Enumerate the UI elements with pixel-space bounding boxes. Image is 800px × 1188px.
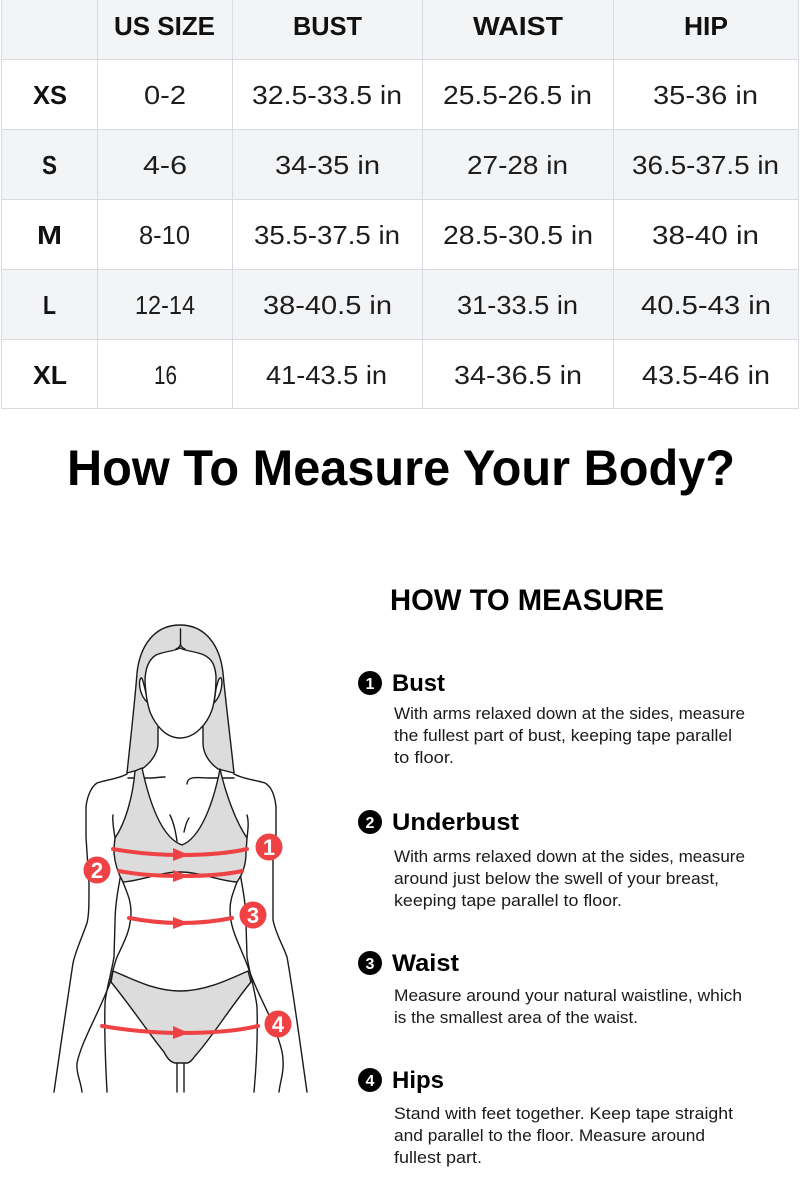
step 1 bust: With arms relaxed down at the sides, measure [394, 705, 745, 723]
step 3 waist: is the smallest area of the waist. [394, 1009, 638, 1027]
row M: 28.5-30.5 in [443, 220, 593, 250]
step 4 hips: 4 [366, 1073, 375, 1090]
marker 2 [84, 856, 110, 884]
step 2 underbust: around just below the swell of your breast, [394, 870, 719, 888]
table header row: BUST [293, 11, 362, 41]
row M: 35.5-37.5 in [254, 220, 400, 250]
marker 1: 1 [263, 835, 275, 860]
row XL: 16 [154, 360, 177, 390]
step 1 bust: 1 [366, 676, 375, 693]
step 2 underbust: keeping tape parallel to floor. [394, 892, 622, 910]
face [145, 648, 216, 738]
body diagram [54, 625, 307, 1092]
step 1 bust: to floor. [394, 749, 454, 767]
hair part [176, 629, 185, 649]
row L: L [43, 290, 56, 320]
table header row: US SIZE [114, 11, 215, 41]
step 3 waist [358, 950, 742, 1027]
row S: 34-35 in [275, 150, 380, 180]
row XL: 43.5-46 in [642, 360, 770, 390]
row M: 38-40 in [652, 220, 759, 250]
row XS: 0-2 [144, 80, 186, 110]
marker 4: 4 [272, 1012, 285, 1037]
step 3 waist: Waist [392, 950, 459, 977]
step 1 bust: Bust [392, 670, 445, 697]
table header row [114, 11, 728, 41]
row XS: XS [33, 80, 67, 110]
row XS: 32.5-33.5 in [252, 80, 402, 110]
row L: 40.5-43 in [641, 290, 771, 320]
step 2 underbust: 2 [366, 815, 375, 832]
ears [139, 678, 222, 703]
row XL: XL [33, 360, 67, 390]
step 2 underbust: With arms relaxed down at the sides, measure [394, 848, 745, 866]
row M [37, 220, 759, 250]
size chart table [1, 0, 799, 408]
row S: 36.5-37.5 in [632, 150, 779, 180]
row L: 38-40.5 in [263, 290, 392, 320]
step 3 waist: 3 [366, 956, 375, 973]
row L: 31-33.5 in [457, 290, 578, 320]
shoulders, arms and torso outlines [54, 774, 127, 1092]
table header row: WAIST [473, 11, 563, 41]
underwear [111, 971, 251, 1063]
row M: M [37, 220, 62, 250]
step 2 underbust: Underbust [392, 809, 519, 836]
row S [42, 150, 779, 180]
step 4 hips [358, 1067, 733, 1167]
measuring tape 2 underbust [119, 870, 242, 882]
row S: 27-28 in [467, 150, 568, 180]
marker 2: 2 [91, 858, 103, 883]
step 4 hips: and parallel to the floor. Measure around [394, 1127, 705, 1145]
step 4 hips: Hips [392, 1067, 444, 1094]
step 4 hips: Stand with feet together. Keep tape straight [394, 1105, 733, 1123]
table header row: HIP [684, 11, 728, 41]
measuring tape 1 bust [113, 848, 247, 861]
marker 3 [240, 902, 266, 928]
marker 3: 3 [247, 903, 259, 928]
row L [43, 290, 771, 320]
row S: 4-6 [143, 150, 187, 180]
how to measure heading: HOW TO MEASURE [390, 584, 664, 617]
bra [114, 768, 247, 882]
step 4 hips: fullest part. [394, 1149, 482, 1167]
hair [127, 625, 234, 773]
marker 4 [264, 1010, 292, 1038]
measuring tape 3 waist [129, 917, 232, 929]
row XL [33, 360, 770, 390]
step 1 bust: the fullest part of bust, keeping tape parallel [394, 727, 732, 745]
row XS: 25.5-26.5 in [443, 80, 592, 110]
step 2 underbust [358, 809, 745, 910]
row XS [33, 80, 758, 110]
row M: 8-10 [139, 220, 190, 250]
row S: S [42, 150, 57, 180]
row XL: 34-36.5 in [454, 360, 582, 390]
step 1 bust [358, 670, 745, 767]
row XS: 35-36 in [653, 80, 758, 110]
step 3 waist: Measure around your natural waistline, which [394, 987, 742, 1005]
measuring tape 4 hips [102, 1026, 258, 1039]
row L: 12-14 [135, 290, 195, 320]
title: How To Measure Your Body? [67, 440, 735, 496]
row XL: 41-43.5 in [266, 360, 387, 390]
marker 1 [256, 834, 282, 860]
